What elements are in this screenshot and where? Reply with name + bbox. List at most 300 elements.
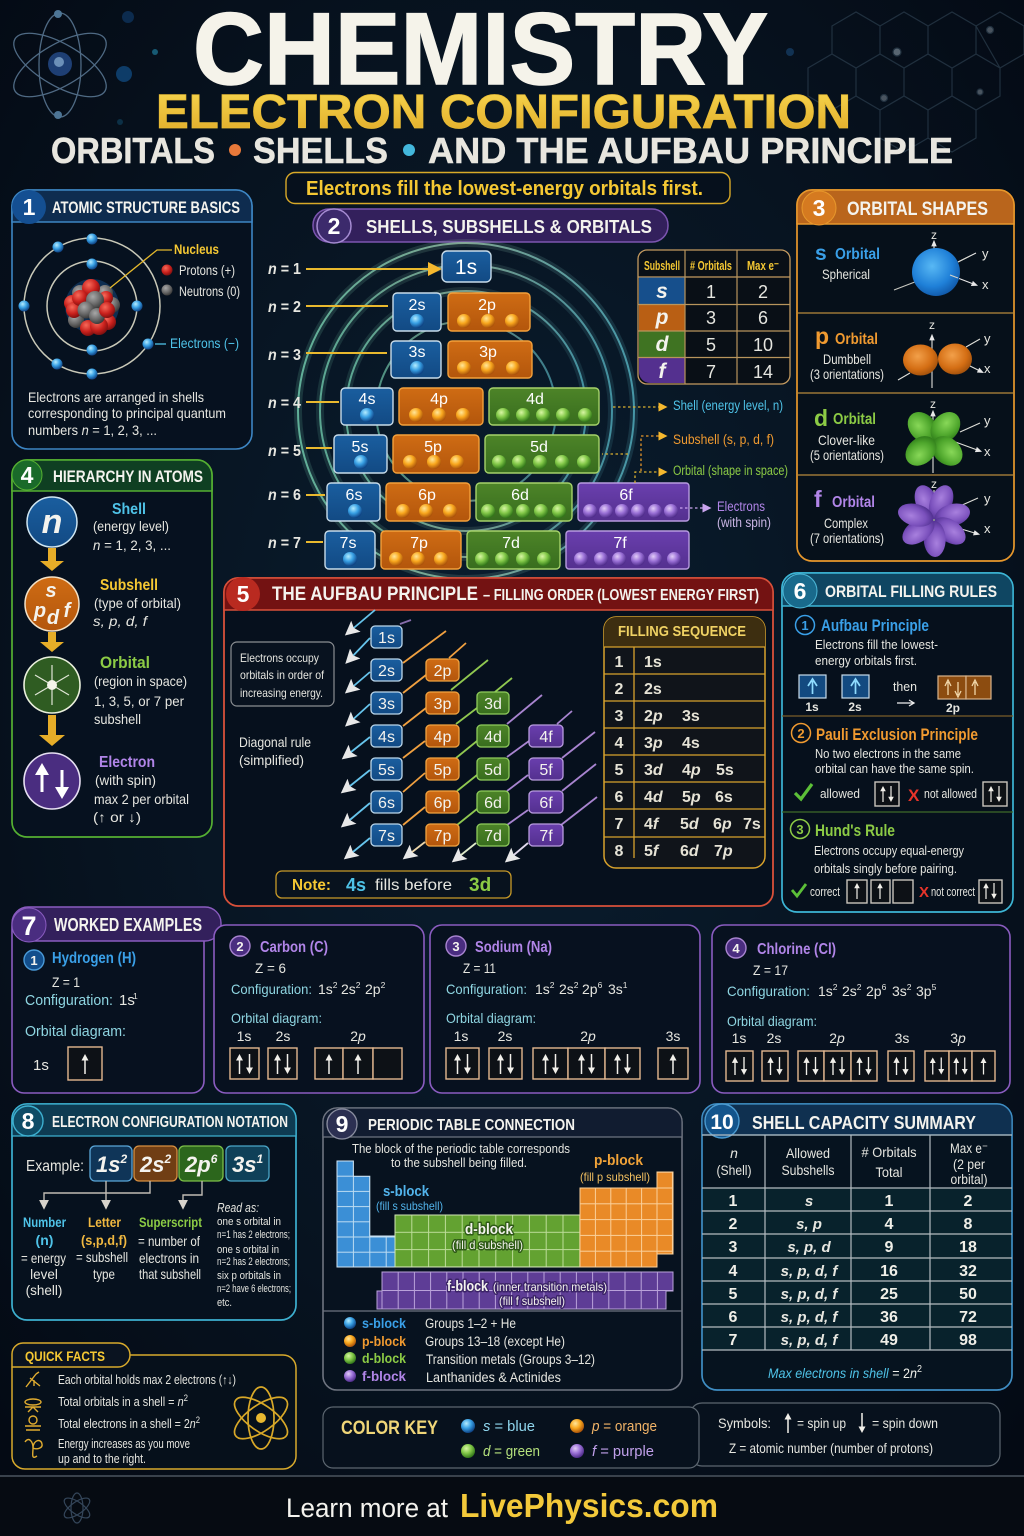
aufbau d boxes: 7d <box>484 828 502 845</box>
aufbau d boxes <box>477 692 509 846</box>
header 5: 5 <box>237 581 250 607</box>
example 4: chlorine: 1s <box>732 1030 746 1046</box>
table: capacities: 4 <box>885 1216 894 1233</box>
header 3 <box>797 190 1014 225</box>
header 1 <box>12 190 252 224</box>
table: filling sequence: 3 <box>615 708 624 725</box>
subshell ladder: s boxes: 2s <box>409 297 425 314</box>
table: capacities: (2 per <box>953 1156 985 1172</box>
example 3: sodium: 6 <box>598 980 603 990</box>
header 1: 1 <box>23 194 36 220</box>
table: capacities: 98 <box>959 1332 977 1349</box>
table: capacities: Total <box>876 1164 902 1180</box>
formula: Max electrons in shell = 2n <box>768 1365 918 1381</box>
example 3: sodium: Configuration: <box>446 981 527 997</box>
header 7 <box>12 907 221 942</box>
table: filling sequence: 4 <box>615 735 624 752</box>
table: capacities: Subshells <box>782 1162 834 1178</box>
electron level: max 2 per orbital <box>94 791 189 807</box>
table: capacities: s, p, d, f <box>781 1286 839 1303</box>
panel: symbols: Symbols: <box>718 1415 771 1431</box>
notation: number: Number <box>23 1214 66 1230</box>
row: p orbital: p <box>815 323 829 349</box>
subshell ladder: d boxes: 4d <box>526 391 544 408</box>
annotations: ladder callouts: Electrons <box>717 499 765 514</box>
subshell ladder: p boxes: 5p <box>424 439 442 456</box>
example 4: chlorine: 2 <box>907 982 912 992</box>
aufbau f boxes: 7f <box>539 828 553 845</box>
header 5 <box>224 577 773 611</box>
table: filling sequence: 3s <box>682 708 700 725</box>
row: p orbital: x <box>984 361 991 376</box>
panel 4: hierarchy in atoms <box>12 460 212 837</box>
table: capacities: s, p <box>796 1216 822 1233</box>
example 3: sodium: 2s <box>498 1028 512 1044</box>
row: s orbital: Spherical <box>822 266 870 282</box>
table: capacities: 1 <box>885 1193 894 1210</box>
example 3: sodium: 1s <box>535 981 550 997</box>
n labels and leaders: n = 4 <box>268 395 301 412</box>
table: capacities: s, p, d, f <box>781 1263 839 1280</box>
icons: fact markers <box>25 1372 42 1457</box>
subshell level: d <box>47 607 60 629</box>
notation example: 2p <box>185 1152 211 1177</box>
table: filling sequence: 6p <box>713 816 732 833</box>
header 9: PERIODIC TABLE CONNECTION <box>368 1117 575 1134</box>
aufbau p boxes: 2p <box>434 663 452 680</box>
example 3: sodium: Sodium (Na) <box>475 939 552 956</box>
quick facts heading <box>12 1343 130 1367</box>
notation arrows <box>44 1181 202 1207</box>
text box: electrons occupy: orbitals in order of <box>240 668 325 682</box>
subshell ladder: d boxes: 6d <box>511 487 529 504</box>
example 2: carbon: Configuration: <box>231 981 312 997</box>
panel 5: aufbau principle <box>224 577 773 906</box>
example 4: chlorine: 3s <box>892 983 907 999</box>
notation example: 2 <box>119 1152 127 1166</box>
diagonal arrows <box>345 610 597 859</box>
atom diagram <box>18 234 160 380</box>
example 2: carbon: 2s <box>341 981 356 997</box>
rule 2: pauli: 2 <box>797 726 805 741</box>
aufbau s boxes: 2s <box>378 663 395 680</box>
annotations: ladder callouts: Orbital (shape in space) <box>673 463 788 478</box>
rule 3: hund: Hund's Rule <box>815 821 895 840</box>
table: filling sequence: 4p <box>682 762 701 779</box>
example 1: hydrogen: Configuration: <box>25 992 113 1009</box>
table: filling sequence: 6d <box>680 843 700 860</box>
block labels <box>376 1152 650 1308</box>
panel 6: orbital filling rules <box>782 573 1013 912</box>
example 2: carbon: 1s <box>237 1028 251 1044</box>
table: capacities: (Shell) <box>716 1162 752 1178</box>
fact text: 2 <box>184 1393 188 1403</box>
header 7: 7 <box>21 911 37 941</box>
subshell ladder: s boxes: 5s <box>352 439 368 456</box>
notation: read as: n=1 has 2 electrons; <box>217 1229 290 1241</box>
subshell level: s, p, d, f <box>93 613 149 629</box>
row: s orbital: z <box>931 228 937 242</box>
example 4: chlorine: 2p <box>866 983 882 999</box>
n labels and leaders: n = 2 <box>268 299 301 316</box>
example 1: hydrogen <box>12 915 204 1093</box>
block labels: (fill p subshell) <box>580 1170 650 1184</box>
example 1: hydrogen: Orbital diagram: <box>25 1023 126 1040</box>
notation: read as <box>217 1200 291 1309</box>
table: subshell orbitals: Subshell <box>644 259 680 273</box>
row: p orbital: (3 orientations) <box>810 366 884 382</box>
n labels and leaders: n = 1 <box>268 261 301 278</box>
subshell ladder: f boxes <box>566 483 689 569</box>
notation: superscript: = number of <box>138 1233 200 1249</box>
panel 8: electron configuration notation <box>12 1104 296 1320</box>
row: f orbital: y <box>984 491 991 506</box>
table: capacities: 6 <box>729 1309 738 1326</box>
rule 1: aufbau: 2p <box>946 701 960 715</box>
subshell ladder: p boxes: 3p <box>479 344 497 361</box>
table: capacities: 16 <box>880 1263 898 1280</box>
example 3: sodium: Orbital diagram: <box>446 1010 536 1026</box>
example 2: carbon: 2 <box>381 980 386 990</box>
footer atom icon <box>61 1493 93 1523</box>
subshell level <box>25 577 181 631</box>
rule 1: aufbau: Aufbau Principle <box>821 616 929 635</box>
header 4 <box>12 460 212 491</box>
panel: color key: f = purple <box>592 1443 654 1460</box>
example 2: carbon: 2 <box>356 980 361 990</box>
subtitle: orbitals shells aufbau: AND THE AUFBAU PRINCIPLE <box>428 130 953 171</box>
text: shells description <box>28 389 226 438</box>
table: filling sequence <box>604 617 765 868</box>
flow arrows <box>39 548 65 746</box>
footer call to action <box>286 1487 718 1524</box>
block legend: s-block <box>362 1315 406 1331</box>
text: shells description: Electrons are arranged in shells <box>28 389 204 405</box>
annotations: ladder callouts <box>602 398 788 530</box>
shell level: n <box>42 503 62 541</box>
aufbau f boxes: 5f <box>539 762 553 779</box>
row: f orbital: Complex <box>824 515 868 531</box>
table: capacities: 8 <box>964 1216 973 1233</box>
table: capacities: 9 <box>885 1239 894 1256</box>
subshell ladder: f boxes: 7f <box>613 535 627 552</box>
notation: read as: one s orbital in <box>217 1216 281 1228</box>
table: subshell orbitals: # Orbitals <box>690 259 732 273</box>
row: p orbital: Orbital <box>835 331 878 348</box>
notation: read as: n=2 have 6 electrons; <box>217 1283 291 1295</box>
subtitle: orbitals shells aufbau: SHELLS <box>253 130 388 171</box>
notation: read as: etc. <box>217 1297 232 1309</box>
table: subshell orbitals: d <box>656 333 670 356</box>
table: filling sequence: 8 <box>615 843 624 860</box>
header 8: ELECTRON CONFIGURATION NOTATION <box>52 1114 288 1131</box>
table: capacities: # Orbitals <box>862 1144 916 1160</box>
note: 4s before 3d <box>276 871 511 898</box>
table: subshell orbitals: 3 <box>706 308 716 328</box>
example 2: carbon: 1s <box>318 981 333 997</box>
example 4: chlorine: 6 <box>882 982 887 992</box>
subshell ladder: p boxes: 7p <box>410 535 428 552</box>
aufbau s boxes: 4s <box>378 729 395 746</box>
table: filling sequence: 1s <box>644 654 662 671</box>
row: s orbital: y <box>982 246 989 261</box>
block labels: (fill f subshell) <box>499 1294 565 1308</box>
block legend: Transition metals (Groups 3–12) <box>426 1352 595 1367</box>
nucleus labels <box>110 241 240 351</box>
aufbau p boxes <box>426 659 459 846</box>
notation example: 1 <box>256 1152 263 1166</box>
table: filling sequence: 6s <box>715 789 733 806</box>
table: capacities <box>702 1135 1012 1350</box>
header 10: 10 <box>710 1111 734 1134</box>
example 3: sodium: 1s <box>454 1028 468 1044</box>
block legend: p-block <box>362 1333 406 1349</box>
row: p orbital: z <box>929 318 935 332</box>
table: subshell orbitals: 2 <box>758 282 768 302</box>
text box: electrons occupy: Electrons occupy <box>240 651 319 665</box>
panel 9: periodic table connection <box>323 1108 682 1390</box>
block labels: f-block <box>447 1278 489 1295</box>
example 1: hydrogen: 1s <box>119 992 135 1009</box>
decoration: molecule network top right <box>786 12 1024 152</box>
aufbau d boxes: 6d <box>484 795 502 812</box>
rule 1: aufbau: 1 <box>801 618 809 633</box>
fact text: Energy increases as you move <box>58 1437 190 1451</box>
example 1: hydrogen: 1s <box>33 1057 49 1074</box>
table: filling sequence: 4f <box>644 816 660 833</box>
panel: color key <box>323 1407 699 1468</box>
row: p orbital: Dumbbell <box>823 351 871 367</box>
example 4: chlorine: 2s <box>767 1030 781 1046</box>
example 2: carbon: 2p <box>365 981 381 997</box>
text: block intro: to the subshell being filled. <box>391 1155 527 1170</box>
panel: symbols <box>690 1403 1000 1466</box>
subshell ladder: p boxes: 4p <box>430 391 448 408</box>
annotations: ladder callouts: (with spin) <box>717 515 771 530</box>
example 1: hydrogen: Z = 1 <box>52 974 80 990</box>
example 1: hydrogen: 1 <box>133 991 138 1001</box>
orbital level <box>24 653 187 727</box>
header 3: ORBITAL SHAPES <box>847 199 988 220</box>
aufbau p boxes: 3p <box>434 696 452 713</box>
fact text: Total orbitals in a shell = n <box>58 1395 192 1409</box>
example 4: chlorine: Chlorine (Cl) <box>757 941 836 958</box>
subshell ladder: f boxes: 6f <box>619 487 633 504</box>
aufbau f boxes: 6f <box>539 795 553 812</box>
aufbau d boxes: 4d <box>484 729 502 746</box>
panel: color key: p = orange <box>591 1418 657 1435</box>
rule 2: pauli: Pauli Exclusion Principle <box>816 725 978 744</box>
table: subshell orbitals: f <box>658 360 668 383</box>
table: capacities: 49 <box>880 1332 898 1349</box>
row: f orbital: (7 orientations) <box>810 530 884 546</box>
table: capacities: s, p, d, f <box>781 1332 839 1349</box>
table: subshell orbitals: s <box>656 280 668 303</box>
table: capacities: s <box>805 1193 813 1210</box>
table: capacities: 32 <box>959 1263 977 1280</box>
block labels: d-block <box>465 1221 514 1238</box>
notation: superscript: that subshell <box>139 1266 201 1282</box>
table: filling sequence: 3d <box>644 762 664 779</box>
table: filling sequence: 6 <box>615 789 624 806</box>
notation example: 3s <box>232 1152 256 1177</box>
example 4: chlorine: 3p <box>916 983 932 999</box>
header 9: 9 <box>336 1111 348 1137</box>
row: p orbital <box>810 318 991 388</box>
table: subshell orbitals: 1 <box>706 282 716 302</box>
table: subshell orbitals: Max e⁻ <box>747 259 779 273</box>
rule 1: aufbau: energy orbitals first. <box>815 653 917 668</box>
row: s orbital: x <box>982 277 989 292</box>
example 4: chlorine: 3s <box>895 1030 909 1046</box>
subshell level: p <box>33 600 46 622</box>
notation example: 6 <box>211 1152 218 1166</box>
header 2: 2 <box>328 213 340 239</box>
subshell ladder: s boxes: 1s <box>455 256 477 279</box>
aufbau f boxes <box>529 725 563 846</box>
example 3: sodium: 2p <box>582 981 598 997</box>
orbital level: subshell <box>94 711 141 727</box>
panel: symbols: = spin down <box>872 1415 938 1431</box>
row: s orbital <box>815 228 989 296</box>
header 4: 4 <box>21 462 34 488</box>
panel: symbols: Z = atomic number (number of protons) <box>729 1440 933 1456</box>
example 4: chlorine: 2p <box>829 1030 845 1046</box>
rule 1: aufbau: then <box>893 679 917 694</box>
table: filling sequence: 4s <box>682 735 700 752</box>
row: d orbital: d <box>814 405 828 431</box>
aufbau p boxes: 4p <box>434 729 452 746</box>
rule 2: pauli: orbital can have the same spin. <box>815 761 974 776</box>
footer call to action: Learn more at <box>286 1493 448 1523</box>
header 5: – FILLING ORDER (LOWEST ENERGY FIRST) <box>483 587 759 604</box>
n labels and leaders <box>268 261 438 552</box>
table: filling sequence: 7p <box>714 843 733 860</box>
example 2: carbon: Carbon (C) <box>260 939 328 956</box>
notation: read as: six p orbitals in <box>217 1270 281 1282</box>
table: filling sequence: 2p <box>644 708 663 725</box>
header 6 <box>782 573 1013 608</box>
row: p orbital: y <box>984 331 991 346</box>
subshell level: (type of orbital) <box>94 595 181 611</box>
row: f orbital: x <box>984 521 991 536</box>
table: filling sequence: FILLING SEQUENCE <box>618 623 746 640</box>
table: subshell orbitals: p <box>655 306 669 329</box>
nucleus labels: Neutrons (0) <box>179 284 240 299</box>
table: filling sequence: 7 <box>615 816 624 833</box>
subshell ladder: p boxes: 2p <box>478 297 496 314</box>
table: filling sequence: 5p <box>682 789 701 806</box>
block legend: f-block <box>362 1368 406 1384</box>
example 2: carbon: 2s <box>276 1028 290 1044</box>
aufbau s boxes: 1s <box>378 630 395 647</box>
block labels: s-block <box>383 1183 430 1200</box>
rule 2: pauli: No two electrons in the same <box>815 746 961 761</box>
rule 3: hund: orbitals singly before pairing. <box>814 861 957 876</box>
table: capacities: n <box>730 1145 738 1161</box>
example 1: hydrogen: Hydrogen (H) <box>52 950 136 967</box>
panel 7: worked examples <box>12 907 1010 1093</box>
example 4: chlorine <box>712 925 1010 1093</box>
electron level: (with spin) <box>95 772 156 788</box>
table: capacities: 3 <box>729 1239 738 1256</box>
panel 2: shells subshells orbitals <box>268 209 790 579</box>
fact text: 2 <box>196 1415 200 1425</box>
aufbau s boxes: 7s <box>378 828 395 845</box>
table: subshell orbitals: 6 <box>758 308 768 328</box>
header 5: THE AUFBAU PRINCIPLE <box>272 584 478 605</box>
table: subshell orbitals: 5 <box>706 335 716 355</box>
header 6: 6 <box>794 578 806 604</box>
header 3: 3 <box>813 195 825 221</box>
row: d orbital: z <box>930 397 936 411</box>
nucleus labels: Electrons (−) <box>170 335 239 351</box>
notation: superscript: Superscript <box>139 1214 202 1230</box>
n labels and leaders: n = 3 <box>268 347 301 364</box>
notation: letter: = subshell <box>76 1249 128 1265</box>
fact text: Each orbital holds max 2 electrons (↑↓) <box>58 1373 236 1387</box>
aufbau d boxes: 5d <box>484 762 502 779</box>
block labels: (inner transition metals) <box>493 1280 607 1294</box>
example 3: sodium: 2s <box>559 981 574 997</box>
notation: superscript <box>138 1214 202 1282</box>
table: filling sequence: 4d <box>644 789 664 806</box>
shell level: (energy level) <box>93 518 169 534</box>
fact text: Total electrons in a shell = 2n <box>58 1417 213 1431</box>
table: capacities: 2 <box>964 1193 973 1210</box>
table: filling sequence: 5f <box>644 843 660 860</box>
example 3: sodium: 2 <box>574 980 579 990</box>
example 3: sodium: 3s <box>608 981 623 997</box>
notation: number: (shell) <box>26 1283 62 1298</box>
row: f orbital: Orbital <box>832 494 875 511</box>
orbital level: 1, 3, 5, or 7 per <box>94 693 184 709</box>
rule 2: pauli: allowed <box>820 786 860 801</box>
subshell level: Subshell <box>100 577 158 594</box>
header 7: WORKED EXAMPLES <box>54 915 202 935</box>
subshell ladder: d boxes: 5d <box>530 439 548 456</box>
example 4: chlorine: 2s <box>842 983 857 999</box>
rule 2: pauli: not allowed <box>924 786 977 801</box>
block labels: (fill s subshell) <box>376 1199 443 1213</box>
aufbau s boxes: 5s <box>378 762 395 779</box>
example 4: chlorine: 3p <box>950 1030 966 1046</box>
panel: quick facts <box>12 1343 296 1469</box>
table: filling sequence: 3p <box>644 735 663 752</box>
electron level: (↑ or ↓) <box>93 809 141 825</box>
example 3: sodium: 2p <box>580 1028 596 1044</box>
nucleus labels: Protons (+) <box>179 263 235 278</box>
row: f orbital <box>810 477 991 557</box>
table: capacities: s, p, d <box>787 1239 832 1256</box>
notation: letter <box>76 1214 128 1282</box>
orbital level: (region in space) <box>94 673 187 689</box>
table: filling sequence: 1 <box>615 654 624 671</box>
footer band <box>0 1476 1024 1536</box>
subtitle: orbitals shells aufbau: ORBITALS <box>51 130 215 171</box>
example 3: sodium: Z = 11 <box>463 960 496 976</box>
text: diagonal rule: Diagonal rule <box>239 734 311 750</box>
example 4: chlorine: 1s <box>818 983 833 999</box>
note: 4s before 3d: 4s <box>346 875 366 895</box>
aufbau d boxes: 3d <box>484 696 502 713</box>
notation example: Example: <box>26 1158 84 1175</box>
subshell ladder: s boxes: 3s <box>409 344 425 361</box>
table: capacities: 18 <box>959 1239 977 1256</box>
callout: key statement: Electrons fill the lowest-energy orbitals first. <box>306 178 703 200</box>
table: capacities: 4 <box>729 1263 738 1280</box>
panel: color key: d = green <box>483 1443 540 1460</box>
